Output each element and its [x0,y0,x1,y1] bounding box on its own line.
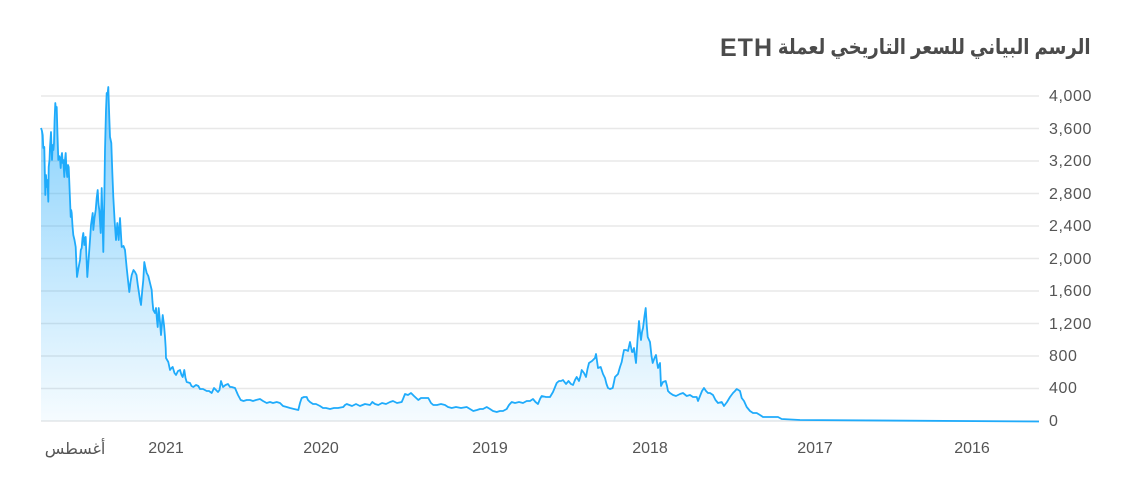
y-axis labels: 800 [1049,348,1078,365]
x-axis labels: 2020 [303,440,339,457]
y-axis labels: 3,200 [1049,153,1092,170]
x-axis labels: 2017 [797,440,833,457]
x-axis labels: أغسطس [45,438,105,459]
y-axis labels [1049,88,1092,430]
x-axis labels: 2018 [632,440,668,457]
y-axis labels: 400 [1049,380,1078,397]
x-axis labels [45,438,990,459]
title: الرسم البياني للسعر التاريخي لعملة [778,36,1091,59]
y-axis labels: 1,600 [1049,283,1092,300]
y-axis labels: 2,800 [1049,186,1092,203]
y-axis labels: 0 [1049,413,1058,430]
y-axis labels: 1,200 [1049,316,1092,333]
x-axis labels: 2021 [148,440,184,457]
price line [41,87,1039,422]
title [720,34,1091,62]
y-axis labels: 2,000 [1049,251,1092,268]
x-axis labels: 2019 [472,440,508,457]
area under price line [41,87,1039,422]
y-axis labels: 2,400 [1049,218,1092,235]
y-axis labels: 4,000 [1049,88,1092,105]
x-axis labels: 2016 [954,440,990,457]
y-axis labels: 3,600 [1049,121,1092,138]
title: ETH [720,34,773,62]
